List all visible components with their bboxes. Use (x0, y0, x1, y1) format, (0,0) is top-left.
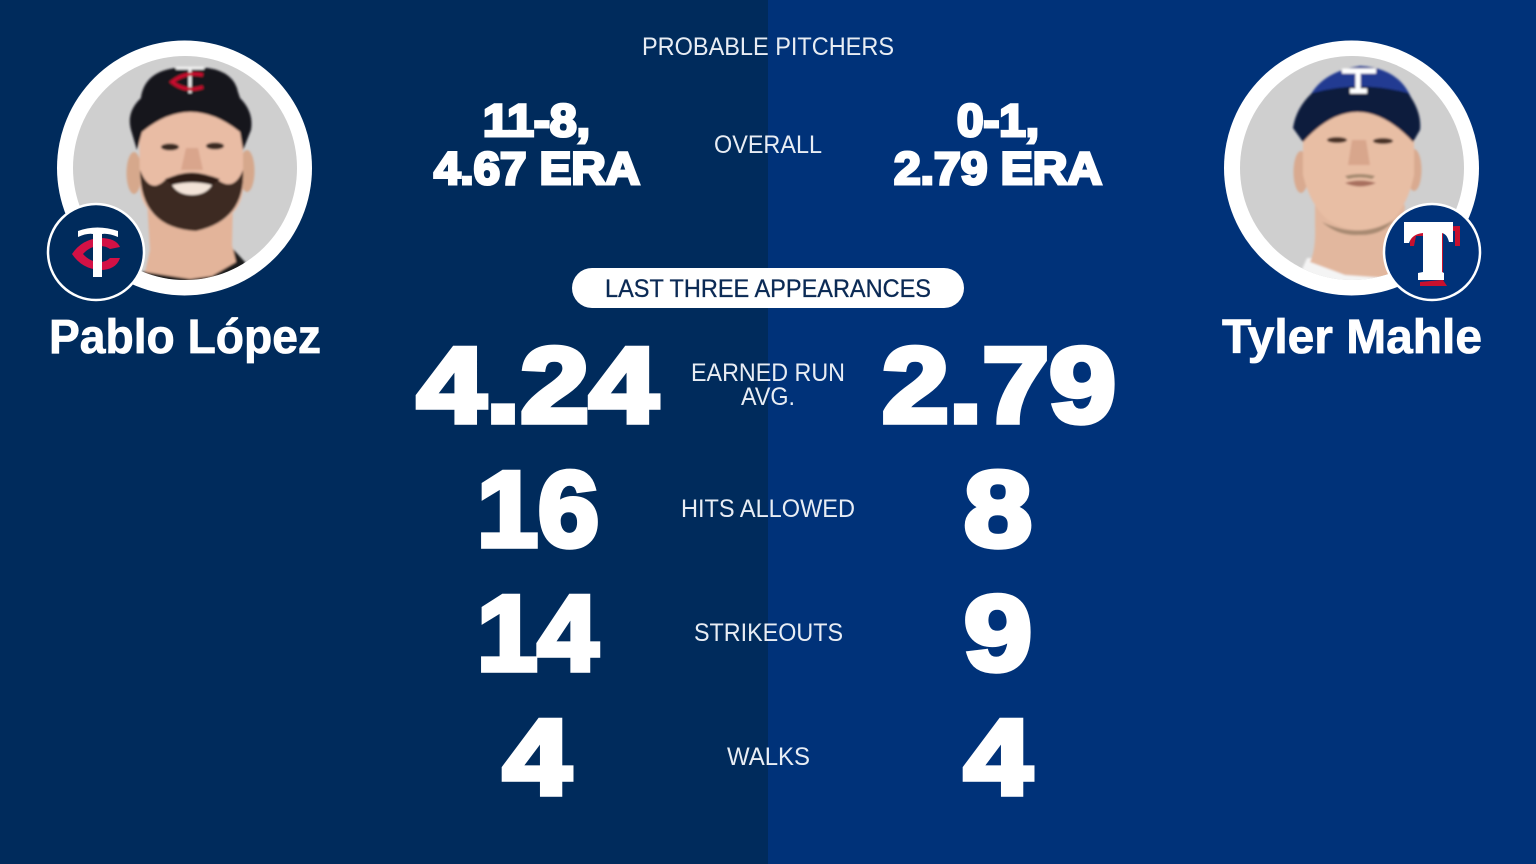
label: earned run avg: EARNED RUN (691, 359, 845, 387)
logo: Rangers badge (1384, 204, 1480, 300)
logo: Twins badge (48, 204, 144, 300)
label: walks: WALKS (727, 743, 810, 771)
stat: Mahle ERA: 2.79 (882, 325, 1116, 445)
stat: López hits: 16 (477, 449, 599, 569)
panel: left pitcher (48, 40, 321, 364)
pill heading: last three appearances (572, 268, 964, 308)
label: hits allowed: HITS ALLOWED (681, 495, 855, 523)
row: walks (503, 697, 1032, 817)
name: Pablo López: Pablo López (49, 311, 321, 364)
background: right team panel (768, 0, 1536, 864)
title: PROBABLE PITCHERS (642, 33, 894, 61)
label: earned run avg (691, 359, 845, 411)
label: strikeouts: STRIKEOUTS (694, 619, 843, 647)
stat: López ERA: 4.24 (417, 325, 658, 445)
stat: López overall line 1: 11-8, (483, 95, 590, 146)
stat: López walks: 4 (503, 697, 571, 817)
label: earned run avg: AVG. (741, 383, 795, 411)
row: overall record (434, 95, 1102, 194)
background: left team panel (0, 0, 768, 864)
label: overall: OVERALL (714, 131, 822, 159)
stat: Mahle walks: 4 (964, 697, 1032, 817)
stat: Mahle overall line 1: 0-1, (957, 95, 1039, 146)
portrait: Pablo López (57, 40, 312, 296)
row: strikeouts (477, 573, 1032, 693)
panel: right pitcher (1222, 40, 1482, 364)
row: hits allowed (477, 449, 1032, 569)
portrait: Tyler Mahle (1224, 40, 1479, 296)
row: earned run average (417, 325, 1116, 445)
stat: Mahle hits: 8 (964, 449, 1032, 569)
stat: López strikeouts: 14 (477, 573, 598, 693)
pill heading: last three appearances: LAST THREE APPEARANCES (605, 275, 931, 303)
stat: López overall line 2: 4.67 ERA (434, 143, 640, 194)
stat: Mahle strikeouts: 9 (964, 573, 1032, 693)
name: Tyler Mahle: Tyler Mahle (1222, 311, 1482, 364)
stat: Mahle overall line 2: 2.79 ERA (894, 143, 1102, 194)
